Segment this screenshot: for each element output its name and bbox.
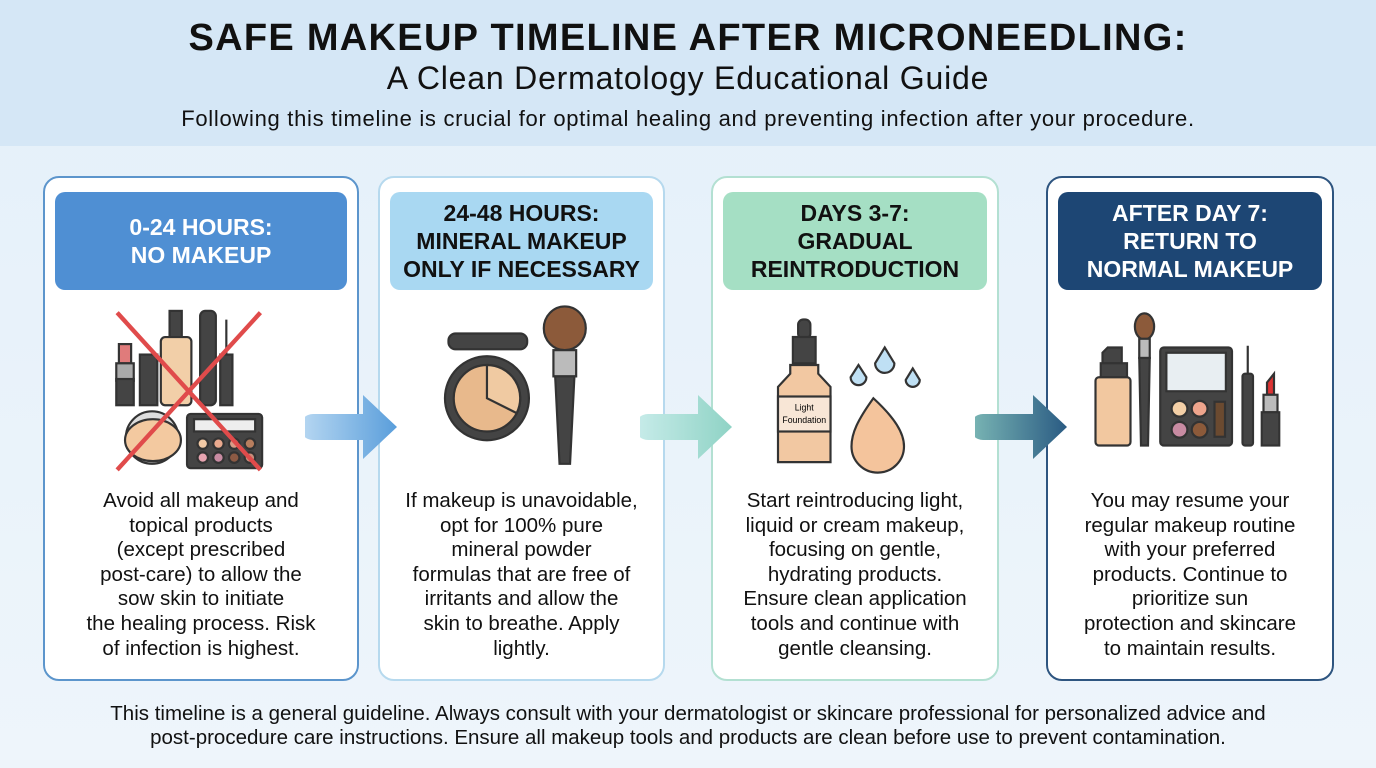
text: days 3-7: gentle cleansing.	[778, 637, 932, 660]
subtitle: A Clean Dermatology Educational Guide	[387, 60, 989, 96]
text: 24-48 hours: lightly.	[493, 637, 550, 660]
heading: 0-24 hours: NO MAKEUP	[131, 242, 271, 268]
heading: days 3-7: REINTRODUCTION	[751, 256, 959, 282]
title: SAFE MAKEUP TIMELINE AFTER MICRONEEDLING:	[188, 17, 1188, 59]
icon: full makeup set	[1094, 312, 1280, 447]
heading: days 3-7: GRADUAL	[798, 228, 912, 254]
heading: after day 7: NORMAL MAKEUP	[1087, 256, 1293, 282]
intro text: Following this timeline is crucial for optimal healing and preventing infection after your procedure.	[181, 106, 1195, 131]
text: days 3-7: tools and continue with	[751, 612, 959, 635]
text: after day 7: products. Continue to	[1093, 563, 1287, 586]
panel: after day 7	[1046, 176, 1334, 681]
heading: 0-24 hours: 0-24 HOURS:	[129, 214, 273, 240]
heading: days 3-7: DAYS 3-7:	[800, 200, 910, 226]
icon: crossed-out makeup	[115, 310, 264, 472]
heading: after day 7: RETURN TO	[1123, 228, 1257, 254]
text: days 3-7: Ensure clean application	[743, 587, 967, 610]
heading: after day 7	[1058, 192, 1322, 290]
text: 0-24 hours: the healing process. Risk	[86, 612, 316, 635]
panel: 0-24 hours	[43, 176, 359, 681]
heading: 0-24 hours	[55, 192, 347, 290]
text: after day 7: regular makeup routine	[1085, 514, 1295, 537]
icon: light foundation and sponge: Light	[795, 403, 814, 413]
header band	[0, 0, 1376, 146]
heading: after day 7: AFTER DAY 7:	[1112, 200, 1268, 226]
text: 24-48 hours: mineral powder	[451, 538, 592, 561]
text: after day 7: protection and skincare	[1084, 612, 1296, 635]
text: days 3-7: focusing on gentle,	[769, 538, 941, 561]
text: 0-24 hours	[86, 489, 316, 660]
text: 24-48 hours: If makeup is unavoidable,	[405, 489, 638, 512]
text: 24-48 hours: irritants and allow the	[425, 587, 618, 610]
text: after day 7	[1084, 489, 1296, 660]
text: 24-48 hours: opt for 100% pure	[440, 514, 603, 537]
text: 0-24 hours: sow skin to initiate	[118, 587, 284, 610]
heading: 24-48 hours: ONLY IF NECESSARY	[403, 256, 640, 282]
panel: days 3-7	[711, 176, 999, 681]
footer disclaimer: post-procedure care instructions. Ensure all makeup tools and products are clean before use to prevent contamination.	[150, 726, 1226, 749]
text: after day 7: You may resume your	[1091, 489, 1289, 512]
text: days 3-7: liquid or cream makeup,	[746, 514, 964, 537]
footer disclaimer	[110, 702, 1266, 749]
text: 0-24 hours: post-care) to allow the	[100, 563, 302, 586]
arrow 2	[640, 395, 732, 459]
text: 0-24 hours: topical products	[129, 514, 273, 537]
heading: 24-48 hours: 24-48 HOURS:	[444, 200, 599, 226]
text: 24-48 hours	[405, 489, 638, 660]
heading: days 3-7	[723, 192, 987, 290]
text: 24-48 hours: formulas that are free of	[413, 563, 630, 586]
icon: light foundation and sponge	[776, 318, 921, 474]
text: days 3-7	[743, 489, 967, 660]
heading: 24-48 hours	[390, 192, 653, 290]
text: days 3-7: hydrating products.	[768, 563, 942, 586]
text: 0-24 hours: (except prescribed	[117, 538, 285, 561]
footer disclaimer: This timeline is a general guideline. Always consult with your dermatologist or skincare professional for personalized advice and	[110, 702, 1266, 725]
arrow 3	[975, 395, 1067, 459]
text: 0-24 hours: of infection is highest.	[102, 637, 300, 660]
arrow 1	[305, 395, 397, 459]
panel: 24-48 hours	[378, 176, 665, 681]
text: 0-24 hours: Avoid all makeup and	[103, 489, 299, 512]
text: after day 7: with your preferred	[1105, 538, 1275, 561]
text: 24-48 hours: skin to breathe. Apply	[423, 612, 620, 635]
icon: mineral powder and brush	[444, 305, 587, 465]
text: days 3-7: Start reintroducing light,	[747, 489, 963, 512]
icon: light foundation and sponge: Foundation	[782, 415, 826, 425]
heading: 24-48 hours: MINERAL MAKEUP	[416, 228, 627, 254]
text: after day 7: to maintain results.	[1104, 637, 1276, 660]
text: after day 7: prioritize sun	[1132, 587, 1248, 610]
